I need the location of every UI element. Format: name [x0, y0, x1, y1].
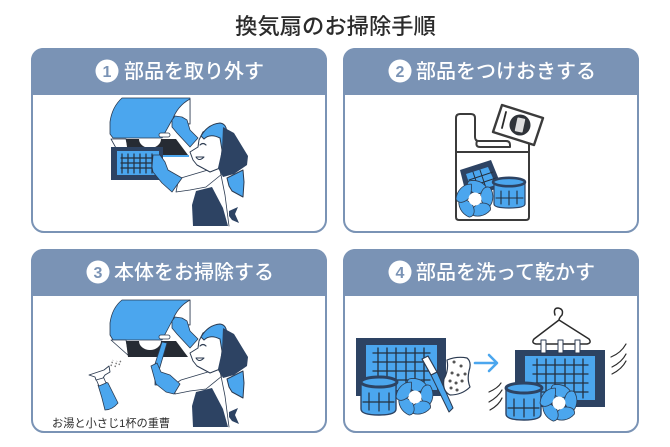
panel: step 4 [343, 249, 639, 432]
step 1 number badge: 1 [103, 64, 112, 81]
motion lines [489, 344, 626, 410]
illustration: soaking bag [454, 105, 543, 222]
title: 換気扇のお掃除手順 [235, 14, 436, 39]
step 2 heading: 部品をつけおきする [416, 60, 596, 83]
step 1 heading: 部品を取り外す [124, 60, 264, 83]
panel: step 3 [31, 249, 327, 432]
step 3 header [31, 249, 327, 296]
step 4 number badge [388, 260, 412, 284]
step 1 header [31, 48, 327, 95]
step 2 number badge: 2 [396, 64, 405, 81]
step 4 heading: 部品を洗って乾かす [416, 261, 595, 284]
illustration: cleaning hood [110, 300, 248, 427]
note text: お湯と小さじ1杯の重曹 [52, 416, 170, 430]
step 3 number badge: 3 [94, 265, 103, 282]
icon: spray bottle [89, 360, 121, 410]
panel: step 2 [343, 48, 639, 232]
illustration: drying parts [506, 308, 605, 426]
illustration: removing parts [110, 98, 248, 226]
arrow [475, 355, 497, 371]
step 2 header [343, 48, 639, 95]
step 4 header [343, 249, 639, 296]
step 3 number badge [86, 260, 110, 284]
illustration: washed parts [356, 338, 470, 420]
step 1 number badge [96, 60, 118, 82]
step 3 heading: 本体をお掃除する [114, 261, 274, 284]
step 2 number badge [388, 60, 412, 82]
panel: step 1 [31, 48, 327, 232]
step 4 number badge: 4 [396, 265, 405, 282]
